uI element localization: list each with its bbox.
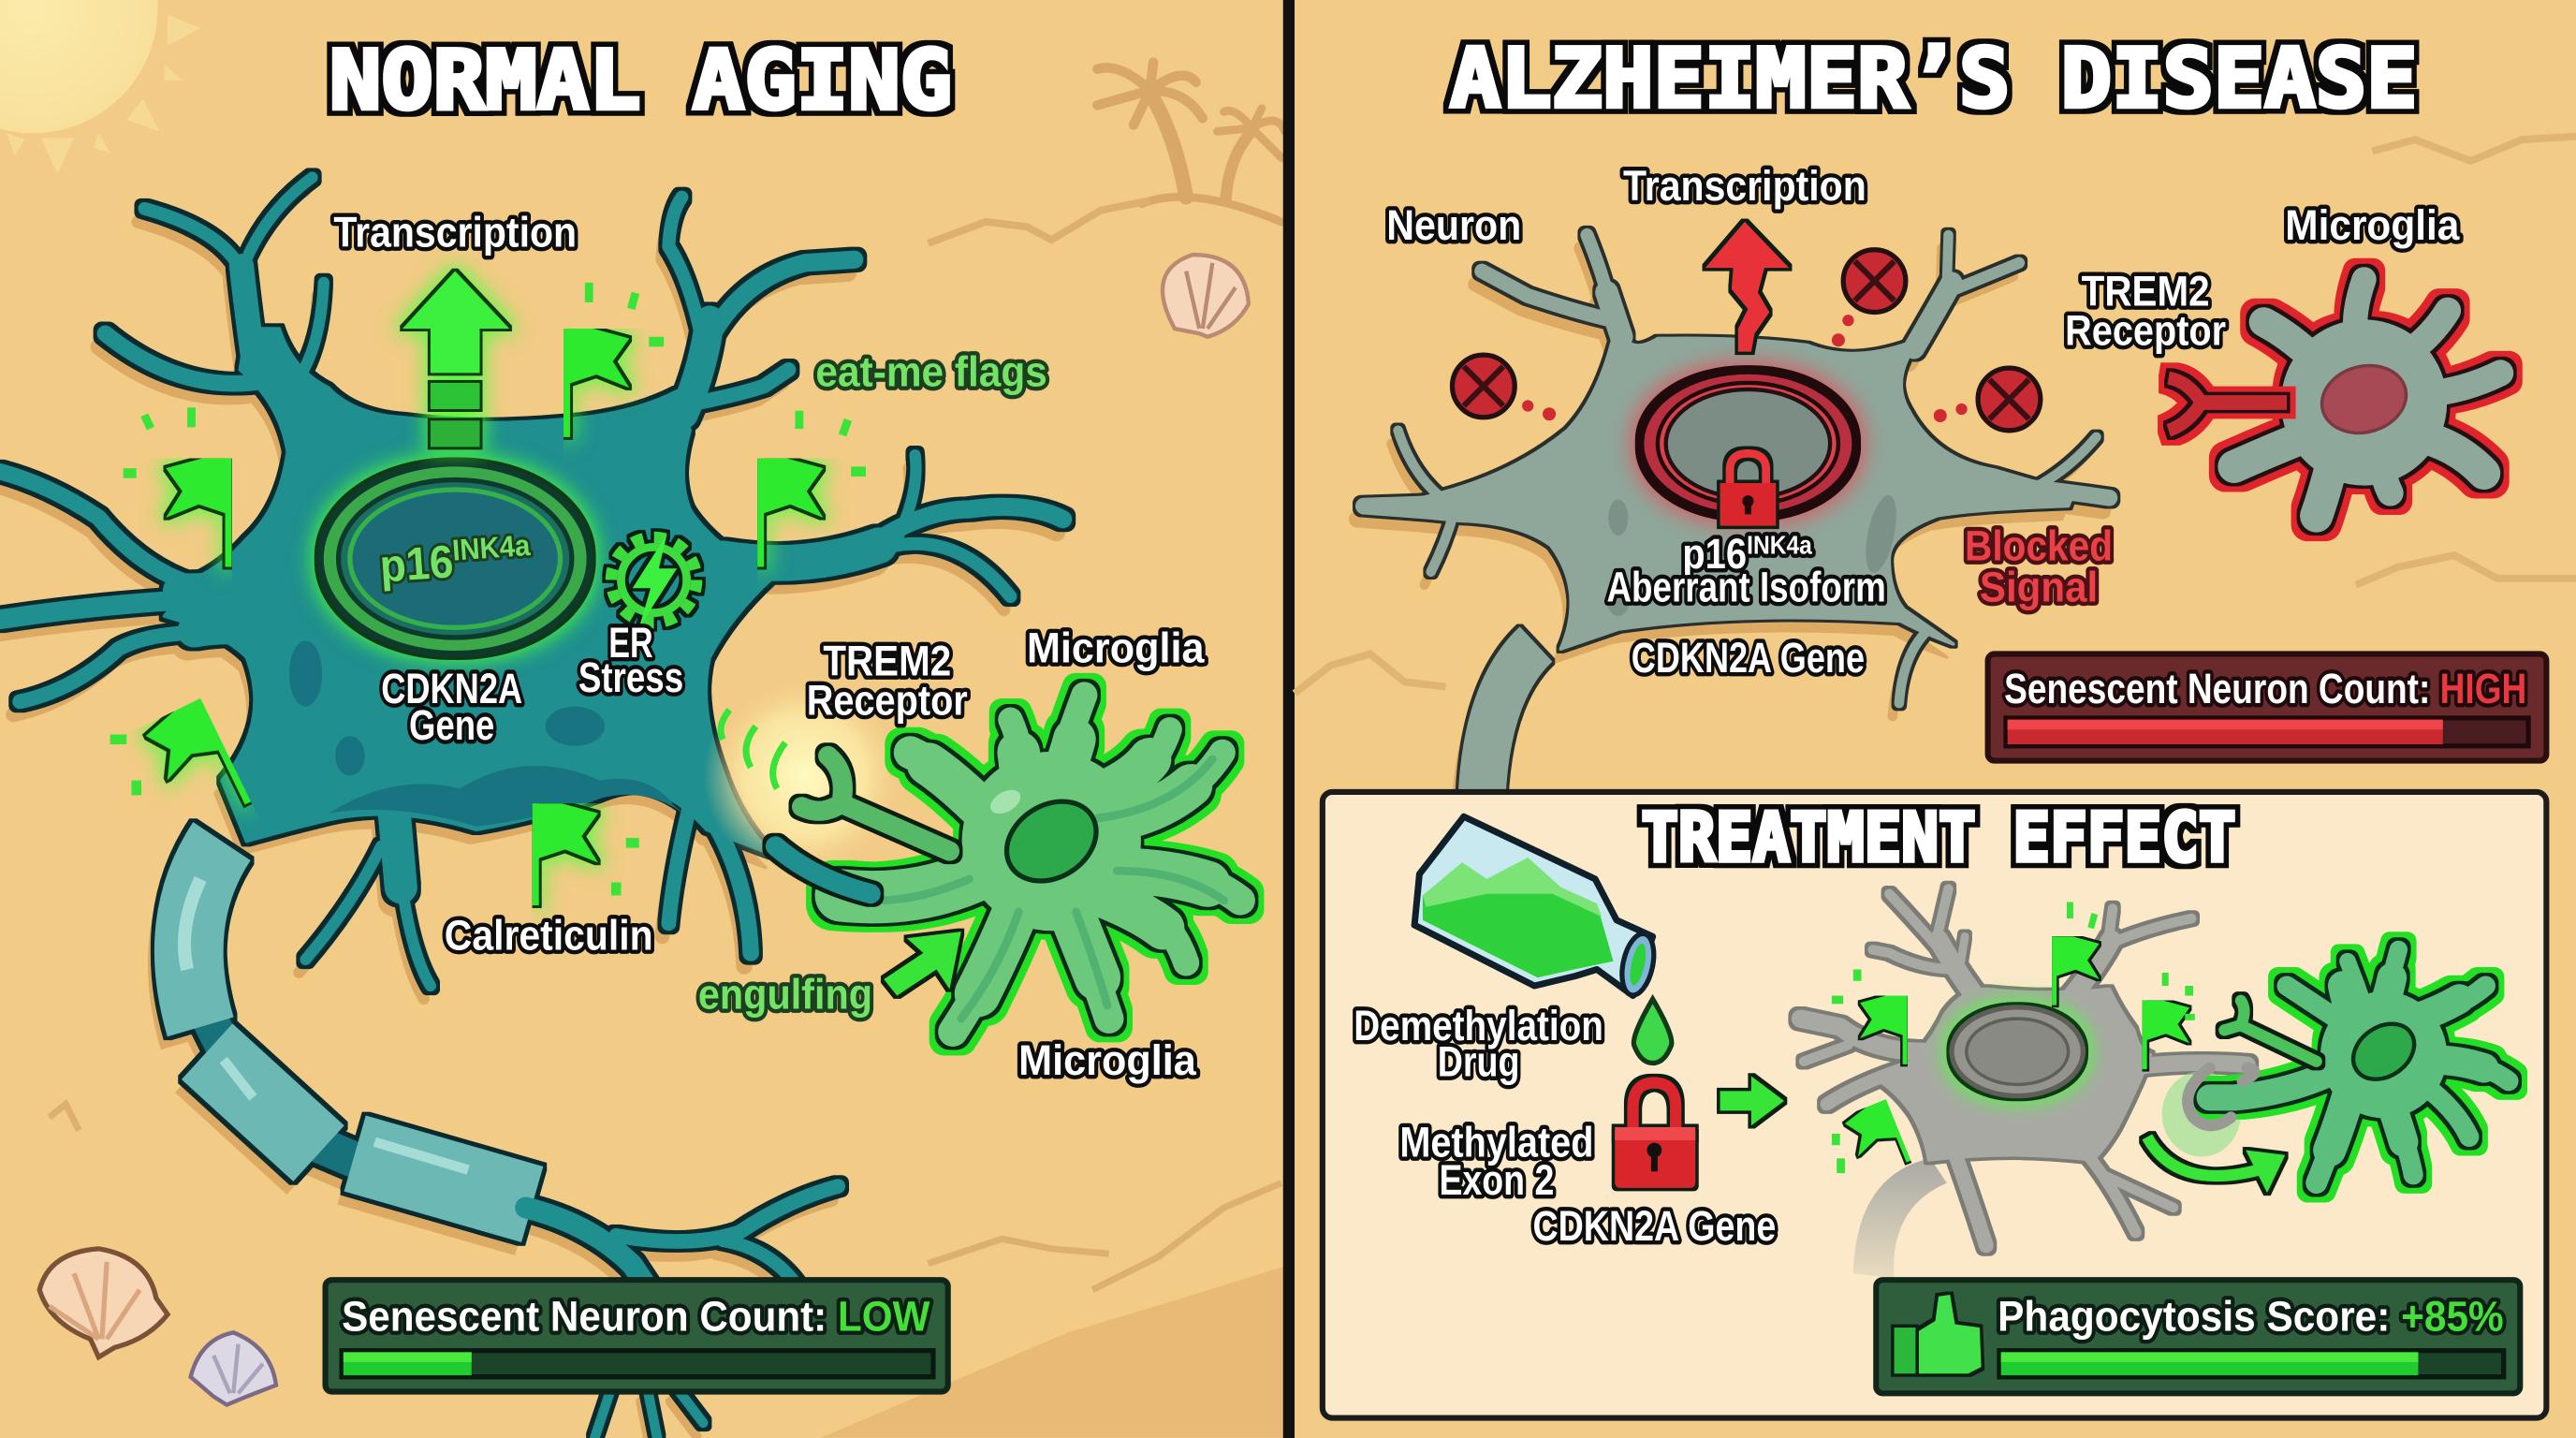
shell top right [1163, 255, 1249, 337]
palm trees [1097, 63, 1284, 222]
icon: potion bottle [1414, 816, 1659, 998]
TREM2 receptor [802, 756, 949, 851]
label: p16 aberrant isoform: Aberrant Isoform [1606, 563, 1886, 610]
neuron: alzheimer's [1362, 235, 2110, 797]
label: Calreticulin: Calreticulin [445, 911, 653, 959]
curved phagocytosis arrow [2147, 1137, 2285, 1193]
flag top [2052, 936, 2100, 1005]
label: demethylation drug: Drug [1438, 1038, 1519, 1086]
flag left [1860, 996, 1908, 1064]
label: methylated exon 2: Exon 2 [1439, 1156, 1554, 1204]
shell small lavender [191, 1332, 276, 1405]
blocked icon 1 [1843, 250, 1906, 312]
label: CDKN2A Gene [381, 665, 522, 749]
label: CDKN2A Gene: CDKN2A [381, 665, 522, 712]
label: Microglia bottom: Microglia [1018, 1036, 1196, 1084]
treated microglia [2162, 949, 2509, 1183]
soma and dendrites [0, 178, 1063, 1438]
status text: Senescent Neuron Count: HIGH [2004, 665, 2526, 712]
label: eat-me flags: eat-me flags [815, 347, 1047, 395]
label: p16 aberrant isoform [1606, 530, 1886, 610]
TREM2 receptor [2224, 1001, 2317, 1062]
label: p16 aberrant isoform: INK4a [1747, 530, 1812, 559]
blocked icon 3 [1978, 368, 2041, 431]
label: CDKN2A Gene: CDKN2A Gene [1532, 1202, 1776, 1250]
flag right [757, 459, 823, 566]
panel: treatment effect [1323, 792, 2546, 1418]
status bar: senescent high [1988, 654, 2546, 761]
sand cracks and dune [50, 200, 1288, 1438]
icon: padlock [1720, 453, 1776, 526]
flag lower [1842, 1099, 1910, 1179]
axon [184, 842, 533, 1204]
dendrite hook around microglia arm [2188, 1068, 2255, 1125]
flag right [2143, 1001, 2189, 1069]
treated flags [1832, 902, 2195, 1179]
engulfing arrow [884, 932, 961, 996]
label: TREM2 Receptor [2065, 267, 2226, 355]
label: p16 aberrant isoform: p16 [1682, 530, 1756, 578]
label: CDKN2A Gene: CDKN2A Gene [1632, 634, 1865, 682]
label: TREM2 Receptor: TREM2 [823, 637, 951, 684]
sand cracks [1295, 137, 2576, 694]
nucleus with p16 [320, 463, 590, 654]
label: demethylation drug: Demethylation [1354, 1002, 1603, 1049]
panel: alzheimer's disease [1295, 31, 2576, 797]
label: TREM2 Receptor: Receptor [807, 676, 968, 724]
arrow right [1720, 1077, 1784, 1125]
label: demethylation drug [1354, 1002, 1603, 1086]
label: methylated exon 2 [1399, 1119, 1593, 1204]
soma shading [289, 640, 690, 827]
label: neuron: Neuron [1386, 201, 1521, 249]
flag top [564, 329, 629, 437]
soma shading [1606, 492, 1902, 616]
status bar: senescent low [326, 1280, 948, 1392]
flag left [166, 459, 232, 566]
neuron dendrite tip in microglia [775, 846, 871, 894]
blocked icon 2 [1453, 355, 1515, 418]
panel divider [1283, 0, 1295, 1438]
label: TREM2 Receptor: TREM2 [2082, 267, 2210, 315]
blocked icons [1453, 250, 2041, 431]
flag sparkles [1832, 902, 2195, 1173]
label: CDKN2A Gene: Gene [409, 701, 494, 749]
icon: thumbs up [1895, 1295, 1982, 1373]
title: alzheimer's disease: ALZHEIMER’S DISEASE [1450, 31, 2418, 126]
label: microglia: Microglia [2285, 201, 2460, 249]
icon: red padlock [1615, 1083, 1695, 1188]
signal arcs [721, 710, 785, 788]
sun [0, 0, 200, 174]
label: transcription: Transcription [1623, 162, 1866, 210]
score text: Phagocytosis Score: +85% [1998, 1293, 2504, 1341]
status text: Senescent Neuron Count: LOW [342, 1293, 930, 1341]
TREM2 receptor red [2169, 378, 2287, 431]
icon: ER stress gear [611, 534, 696, 627]
label: ER Stress [578, 619, 683, 701]
treated neuron [1801, 888, 2247, 1278]
flag lower left [141, 698, 251, 830]
label: ER Stress: Stress [578, 653, 683, 701]
label: engulfing: engulfing [698, 971, 872, 1019]
title: normal aging: NORMAL AGING [329, 33, 952, 128]
label: Microglia top: Microglia [1027, 624, 1205, 671]
label: TREM2 Receptor: Receptor [2065, 307, 2226, 355]
label: transcription: Transcription [333, 208, 577, 256]
shell bottom left [39, 1249, 168, 1357]
label: blocked signal: Blocked [1965, 521, 2113, 569]
microglia: alzheimer's [2169, 279, 2500, 516]
label: methylated exon 2: Methylated [1399, 1119, 1593, 1167]
panel: normal aging [0, 0, 1288, 1438]
nucleus with lock [1641, 372, 1854, 526]
treated nucleus [1952, 1007, 2083, 1096]
microglia: normal aging [703, 674, 1240, 1032]
transcription arrow up [402, 271, 509, 447]
flags [110, 283, 866, 905]
flag calreticulin [533, 803, 598, 905]
label: blocked signal [1965, 521, 2113, 610]
status bar: phagocytosis score [1876, 1280, 2520, 1393]
label: blocked signal: Signal [1980, 563, 2098, 610]
red dots [1522, 315, 1968, 422]
blocked transcription arrow [1705, 222, 1789, 352]
label: TREM2 Receptor [807, 637, 968, 724]
nucleus label p16 INK4a: p16 [378, 536, 461, 593]
treated axon [1853, 1158, 1947, 1278]
label: ER Stress: ER [608, 619, 653, 667]
nucleus label p16 INK4a: INK4a [451, 528, 532, 567]
title: treatment effect: TREATMENT EFFECT [1641, 799, 2236, 877]
neuron: normal aging [0, 178, 1063, 1438]
icon: green drop [1633, 999, 1672, 1064]
flag sparkles [110, 283, 866, 895]
